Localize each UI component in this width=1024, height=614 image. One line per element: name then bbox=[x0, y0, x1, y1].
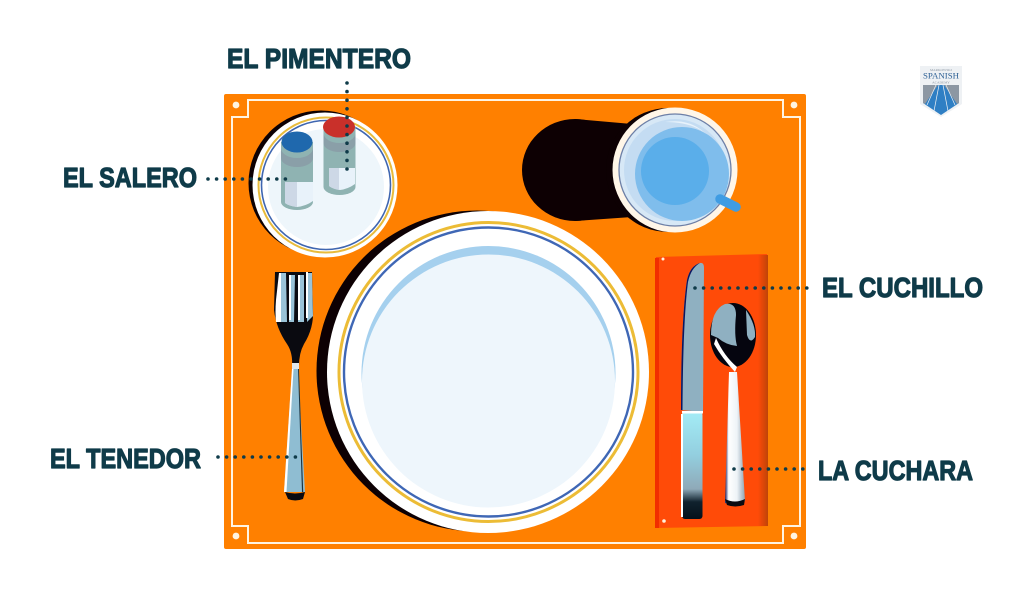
academy logo shield: SPANISH bbox=[923, 72, 959, 80]
knife bbox=[681, 263, 704, 519]
academy logo shield: ACADEMY bbox=[932, 80, 950, 84]
cup handle bbox=[720, 199, 736, 207]
fork bbox=[274, 272, 313, 500]
dotted leader: el salero bbox=[208, 177, 288, 181]
spoon bbox=[710, 303, 756, 506]
pepper shaker bbox=[323, 116, 356, 195]
label: la cuchara: LA CUCHARA bbox=[818, 455, 973, 486]
academy logo shield bbox=[920, 66, 962, 117]
dinner plate bbox=[316, 210, 649, 533]
water cup with shadow bbox=[522, 108, 738, 232]
napkin bbox=[655, 254, 768, 528]
placemat bbox=[224, 94, 806, 549]
label: el salero: EL SALERO bbox=[63, 162, 197, 193]
academy logo shield: MARKOWSKI bbox=[930, 68, 953, 72]
label: el cuchillo: EL CUCHILLO bbox=[822, 272, 983, 303]
side plate with salt and pepper shakers bbox=[248, 110, 398, 258]
dotted leader: la cuchara bbox=[734, 467, 805, 471]
label: el pimentero: EL PIMENTERO bbox=[227, 43, 411, 74]
salt shaker bbox=[281, 132, 313, 210]
dotted leader: el tenedor bbox=[218, 455, 297, 459]
dotted leader: el pimentero bbox=[345, 83, 349, 177]
dotted leader: el cuchillo bbox=[695, 286, 815, 290]
label: el tenedor: EL TENEDOR bbox=[50, 443, 201, 474]
